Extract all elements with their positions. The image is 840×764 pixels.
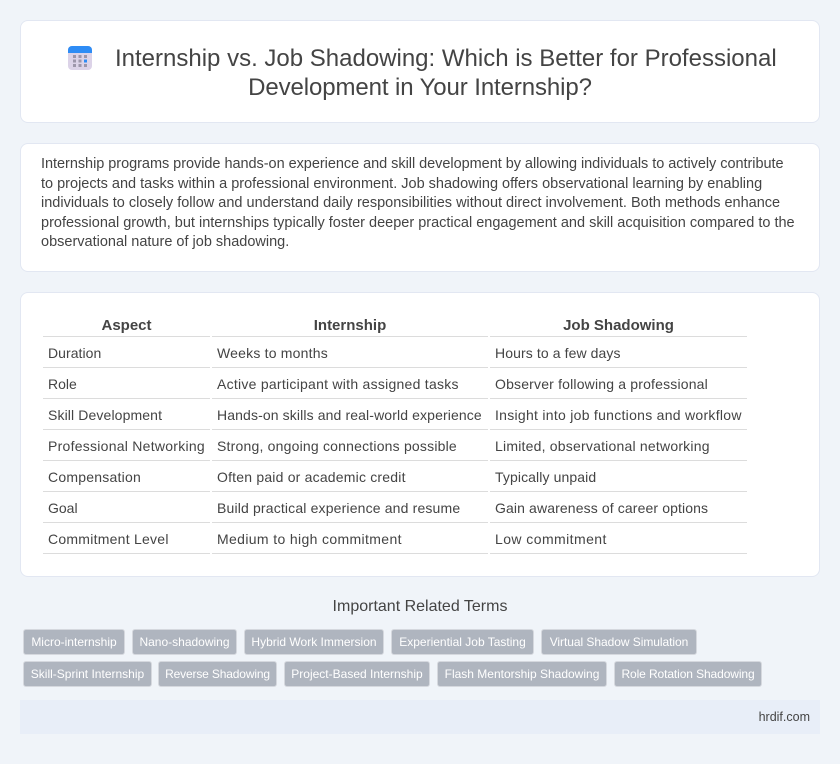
table header row: Job Shadowing — [563, 317, 674, 334]
row: Commitment Level — [48, 531, 607, 547]
row: Duration: Hours to a few days — [495, 345, 621, 361]
intro paragraph: to projects and tasks within a professional environment. Job shadowing offers observational learning by enabling — [41, 176, 762, 192]
title: Internship vs. Job Shadowing: Which is Better for Professional — [115, 45, 777, 72]
related terms chips: Role Rotation Shadowing — [621, 667, 755, 681]
intro paragraph: individuals to closely follow and understand daily responsibilities without direct involvement. Both methods enhance — [41, 195, 780, 211]
row: Professional Networking: Professional Networking — [48, 438, 205, 454]
row: Goal: Build practical experience and resume — [217, 500, 460, 516]
row: Duration — [48, 345, 621, 361]
related terms heading: Important Related Terms — [333, 598, 507, 615]
related terms chips — [23, 629, 762, 687]
title: Development in Your Internship? — [248, 74, 592, 101]
row: Duration: Weeks to months — [217, 345, 328, 361]
row: Role: Observer following a professional — [495, 376, 708, 392]
footer source text: hrdif.com — [759, 710, 810, 724]
row: Duration: Duration — [48, 345, 101, 361]
row: Professional Networking: Limited, observational networking — [495, 438, 710, 454]
row: Goal: Goal — [48, 500, 78, 516]
row: Compensation — [48, 469, 596, 485]
table header row: Internship — [314, 317, 386, 334]
icon: calendar — [68, 46, 92, 70]
table header row — [101, 317, 674, 334]
row: Role — [48, 376, 708, 392]
row: Skill Development: Insight into job functions and workflow — [495, 407, 742, 423]
row: Goal: Gain awareness of career options — [495, 500, 708, 516]
row: Commitment Level: Medium to high commitment — [217, 531, 402, 547]
footer bar — [20, 700, 820, 734]
row: Skill Development: Skill Development — [48, 407, 162, 423]
intro text panel — [20, 143, 820, 272]
comparison table panel — [20, 292, 820, 577]
row: Commitment Level: Low commitment — [495, 531, 607, 547]
intro paragraph — [41, 156, 795, 250]
row: Skill Development: Hands-on skills and real-world experience — [217, 407, 482, 423]
header panel — [20, 20, 820, 123]
intro paragraph: professional growth, but internships typically foster deeper practical engagement and skill acquisition compared to the — [41, 215, 795, 231]
row: Professional Networking: Strong, ongoing connections possible — [217, 438, 457, 454]
related terms chips: Virtual Shadow Simulation — [550, 635, 688, 649]
related terms chips: Nano-shadowing — [139, 635, 230, 649]
row: Compensation: Compensation — [48, 469, 141, 485]
row: Compensation: Typically unpaid — [495, 469, 596, 485]
row: Role: Active participant with assigned tasks — [217, 376, 459, 392]
related terms chips: Hybrid Work Immersion — [251, 635, 377, 649]
intro paragraph: observational nature of job shadowing. — [41, 234, 289, 250]
related terms chips: Reverse Shadowing — [165, 667, 270, 681]
row: Role: Role — [48, 376, 77, 392]
row: Commitment Level: Commitment Level — [48, 531, 169, 547]
title — [115, 45, 777, 101]
table header row: Aspect — [101, 317, 152, 334]
related terms chips: Project-Based Internship — [291, 667, 423, 681]
intro paragraph: Internship programs provide hands-on experience and skill development by allowing individuals to actively contribute — [41, 156, 784, 172]
related terms chips: Skill-Sprint Internship — [31, 667, 144, 681]
related terms chips: Micro-internship — [31, 635, 117, 649]
row: Professional Networking — [48, 438, 710, 454]
related terms chips: Experiential Job Tasting — [399, 635, 526, 649]
row: Goal — [48, 500, 708, 516]
row: Skill Development — [48, 407, 742, 423]
row: Compensation: Often paid or academic credit — [217, 469, 406, 485]
related terms chips: Flash Mentorship Shadowing — [445, 667, 599, 681]
